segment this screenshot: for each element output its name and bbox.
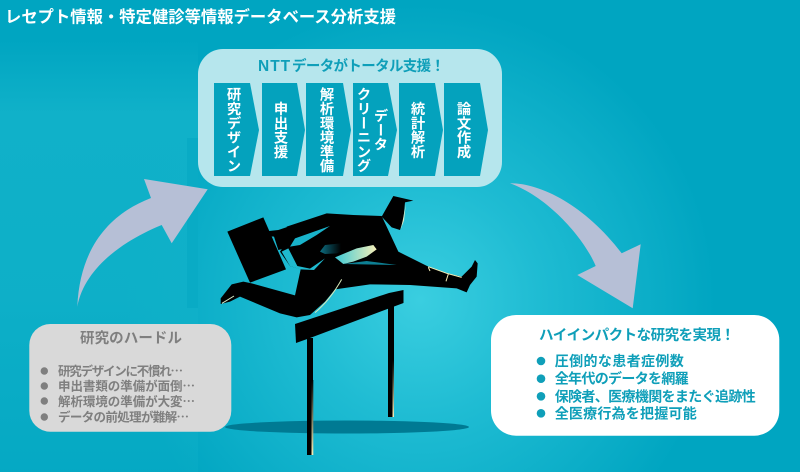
- hurdle shadow: [225, 420, 469, 434]
- step: application support: 申出支援: [270, 101, 292, 160]
- step: statistical analysis: 統計解析: [408, 101, 428, 159]
- step: statistical analysis: [399, 83, 443, 176]
- panel: high impact research: [491, 315, 779, 436]
- benefits list: 圧倒的な患者症例数: [555, 351, 684, 371]
- step: paper writing: 論文作成: [454, 101, 474, 160]
- step: data cleaning: データ: [370, 107, 392, 152]
- step: research design: [214, 83, 259, 176]
- step: paper writing: [444, 83, 488, 176]
- title: レセプト情報・特定健診等情報データベース分析支援: [5, 4, 396, 28]
- hurdles list: 研究デザインに不慣れ…: [58, 360, 183, 380]
- arrow: down to high impact panel: [510, 183, 641, 308]
- step: analysis environment: 解析環境準備: [316, 87, 338, 174]
- step: data cleaning: [353, 83, 397, 176]
- benefits list: 全年代のデータを網羅: [555, 369, 689, 389]
- arrow: up into support panel: [77, 179, 208, 307]
- step: application support: [262, 83, 305, 176]
- step: research design: 研究デザイン: [224, 87, 244, 173]
- hurdles heading: 研究のハードル: [80, 330, 182, 347]
- panel: NTT Data support: [198, 49, 502, 187]
- high impact heading: ハイインパクトな研究を実現！: [539, 327, 735, 344]
- hurdles list: 申出書類の準備が面倒…: [58, 376, 195, 394]
- panel heading: NTT: [258, 58, 291, 75]
- benefits list: [537, 351, 756, 423]
- step: analysis environment: [306, 83, 351, 176]
- hurdles list: 解析環境の準備が大変…: [58, 391, 195, 410]
- step: data cleaning: クリーニング: [354, 87, 374, 173]
- illustration: businessman jumping hurdle: [221, 196, 478, 455]
- benefits list: 全医療行為を把握可能: [555, 403, 697, 423]
- businessman silhouette: [221, 196, 478, 317]
- hurdle: [295, 290, 404, 455]
- benefits list: 保険者、医療機関をまたぐ追跡性: [555, 386, 756, 406]
- hurdles list: データの前処理が難解…: [58, 406, 189, 426]
- panel: research hurdles: [29, 324, 231, 432]
- panel heading: データがトータル支援！: [292, 55, 445, 76]
- hurdles list: [41, 360, 195, 426]
